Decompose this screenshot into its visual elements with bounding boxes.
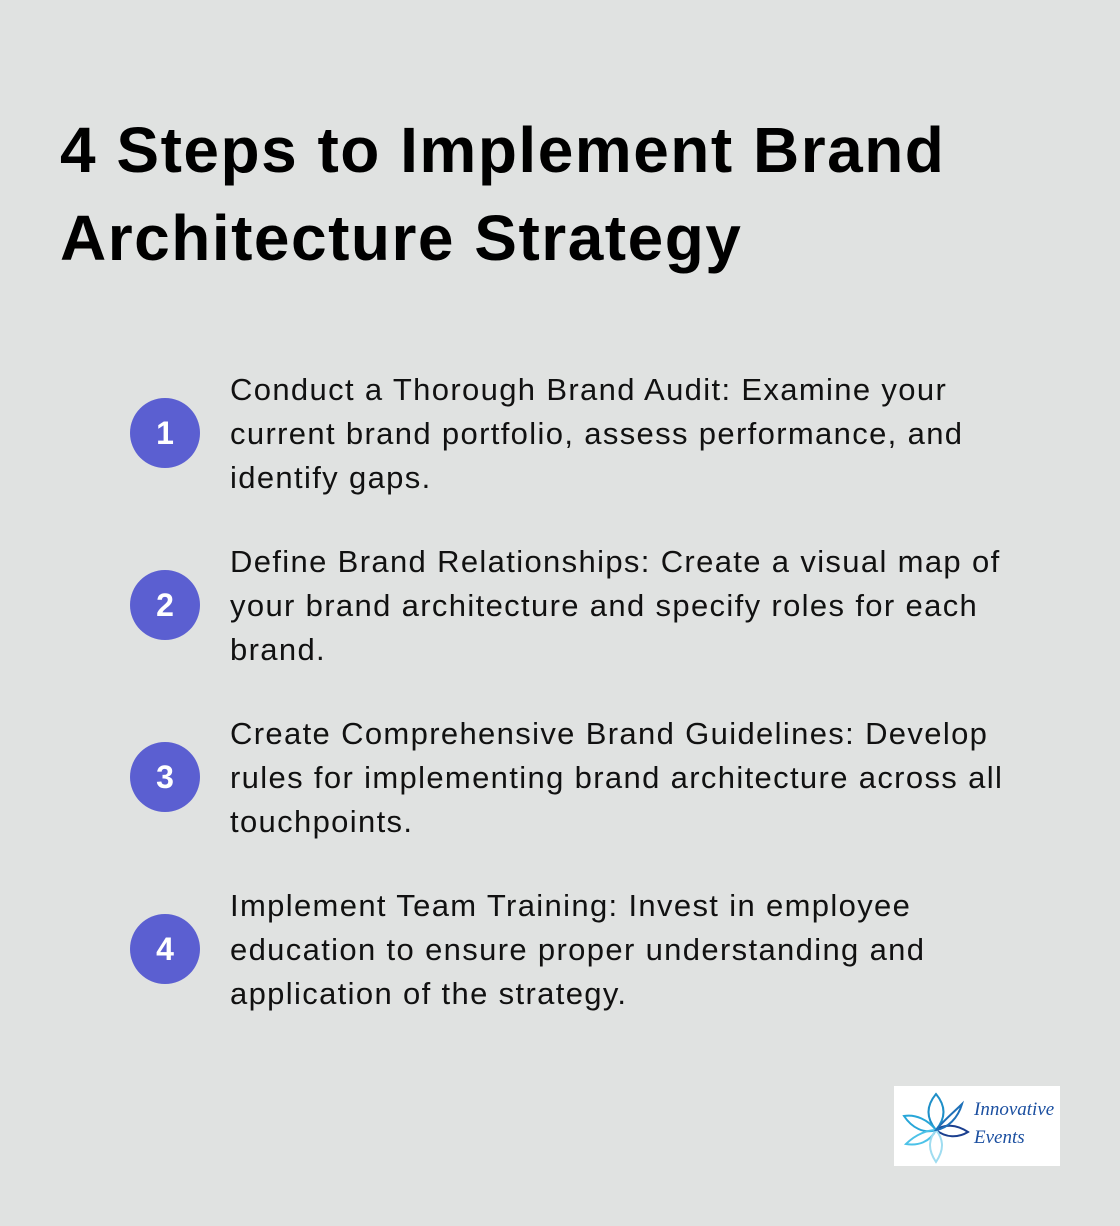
step 1: [130, 372, 963, 495]
step 2: 2: [156, 587, 174, 623]
logo: [894, 1086, 1060, 1166]
step 4: [130, 888, 925, 1011]
step 2: [130, 544, 1001, 667]
step 2: your brand architecture and specify roles for each: [230, 588, 978, 623]
step 1: identify gaps.: [230, 460, 432, 495]
step 3: 3: [156, 759, 174, 795]
step 4: education to ensure proper understanding and: [230, 932, 925, 967]
logo: Events: [974, 1127, 1025, 1148]
step 3: [130, 716, 1003, 839]
step 1: current brand portfolio, assess performance, and: [230, 416, 963, 451]
step 2: brand.: [230, 632, 326, 667]
step 3: rules for implementing brand architecture across all: [230, 760, 1003, 795]
step 1: Conduct a Thorough Brand Audit: Examine your: [230, 372, 947, 407]
step 4: 4: [156, 931, 174, 967]
step 3: touchpoints.: [230, 804, 413, 839]
logo: Innovative: [974, 1099, 1054, 1120]
step 3: Create Comprehensive Brand Guidelines: Develop: [230, 716, 988, 751]
step 4: application of the strategy.: [230, 976, 627, 1011]
title: [60, 114, 945, 274]
step 4: Implement Team Training: Invest in employee: [230, 888, 911, 923]
step 1: 1: [156, 415, 174, 451]
title: 4 Steps to Implement Brand: [60, 114, 945, 186]
step 2: Define Brand Relationships: Create a visual map of: [230, 544, 1001, 579]
title: Architecture Strategy: [60, 202, 742, 274]
